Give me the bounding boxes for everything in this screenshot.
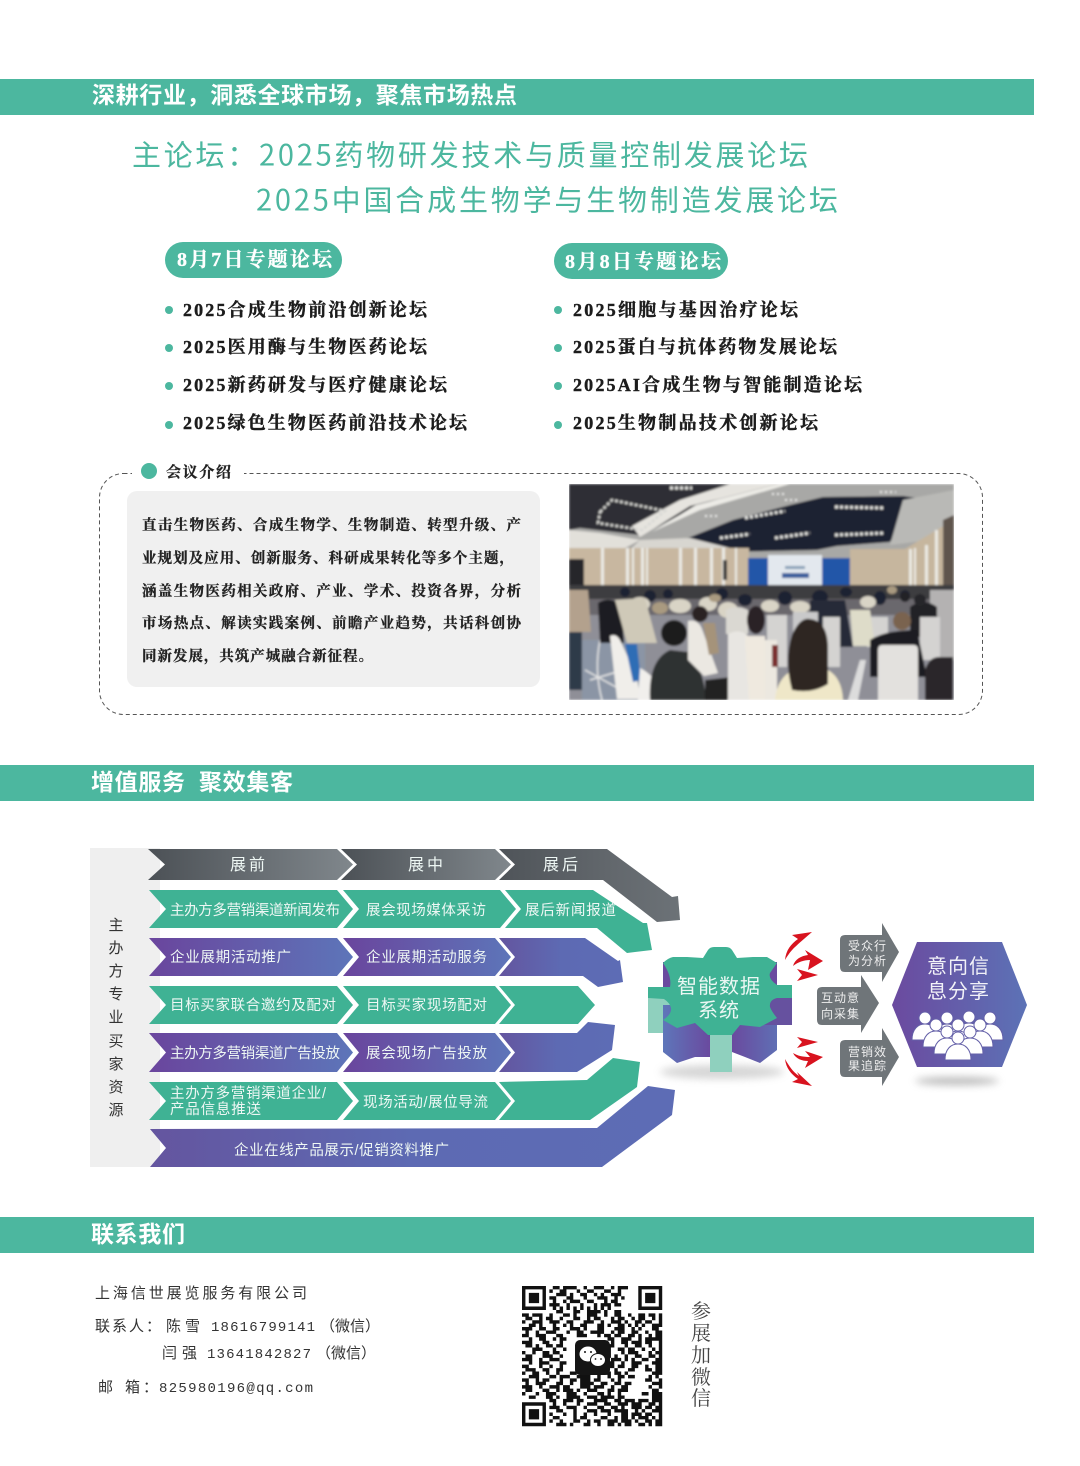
text block: contact details: 邮: [98, 1379, 113, 1396]
arrow: interactive intent collection: 互动意: [821, 990, 859, 1005]
vertical label: add WeChat: 参: [691, 1300, 711, 1323]
QR code: [522, 1286, 662, 1426]
section banner: contact us: [0, 1217, 1034, 1253]
main forum title: [132, 132, 838, 220]
vertical label: add WeChat: 信: [691, 1387, 711, 1410]
main forum title: 主论坛：2025药物研发技术与质量控制发展论坛: [132, 132, 808, 174]
text block: contact details: （微信）: [320, 1318, 380, 1335]
row: product push: 产品信息推送: [170, 1101, 262, 1118]
text block: contact details: 联系人：: [95, 1318, 161, 1335]
vertical label: add WeChat: 微: [691, 1366, 711, 1389]
text block: contact details: [95, 1285, 380, 1397]
row: advertising: 展会现场广告投放: [366, 1045, 488, 1062]
arrow: interactive intent collection: 向采集: [821, 1006, 859, 1021]
section banner: value-added services: 增值服务: [91, 769, 185, 795]
panel: August 7 forums: 2025医用酶与生物医药论坛: [183, 337, 429, 357]
arrow: audience behavior analysis: [840, 923, 899, 982]
row: buyer matching: [149, 986, 595, 1024]
panel: organizer buyer resources: 方: [108, 963, 124, 980]
panel: August 8 forums: 2025蛋白与抗体药物发展论坛: [573, 337, 839, 357]
row: online promotion: 企业在线产品展示/促销资料推广: [234, 1141, 449, 1159]
panel: conference introduction: [100, 460, 982, 714]
arrow: marketing effect tracking: 营销效: [848, 1044, 886, 1059]
text block: contact details: 825980196@qq.com: [159, 1381, 313, 1397]
row: stage header: 展前: [230, 856, 265, 874]
hexagon: intent information sharing: [892, 942, 1027, 1085]
row: news release: 主办方多营销渠道新闻发布: [170, 902, 340, 919]
text block: introduction: 涵盖生物医药相关政府、产业、学术、投资各界，分析: [142, 582, 522, 600]
hexagon: intent information sharing: 意向信: [927, 955, 989, 978]
section banner: industry focus: 深耕行业，洞悉全球市场，聚焦市场热点: [92, 82, 517, 108]
arrow: interactive intent collection: [817, 975, 879, 1033]
icon: red arrows: [785, 932, 823, 1086]
panel: August 7 forums: 2025绿色生物医药前沿技术论坛: [183, 413, 469, 433]
icon: heading dot: [141, 463, 157, 479]
section banner: industry focus: [0, 79, 1034, 115]
text block: introduction: 市场热点、解读实践案例、前瞻产业趋势，共话科创协: [142, 614, 522, 632]
text block: contact details: 箱: [125, 1379, 140, 1396]
row: advertising: 主办方多营销渠道广告投放: [170, 1045, 340, 1062]
text block: introduction: 同新发展，共筑产城融合新征程。: [142, 647, 373, 665]
row: stage header: 展中: [408, 856, 443, 874]
row: product push: 主办方多营销渠道企业/: [170, 1084, 327, 1102]
row: product push: [149, 1058, 640, 1120]
text block: introduction: [127, 491, 540, 687]
row: news release: 展后新闻报道: [525, 902, 616, 919]
icon: smart data gear: 智能数据: [677, 975, 760, 998]
icon: WeChat logo: [575, 1340, 610, 1375]
arrow: marketing effect tracking: [840, 1028, 899, 1086]
section banner: value-added services: 聚效集客: [199, 769, 293, 795]
text block: contact details: （微信）: [316, 1345, 376, 1362]
text block: contact details: 陈雪: [166, 1317, 200, 1335]
panel: organizer buyer resources: 专: [108, 986, 124, 1003]
flow diagram: marketing channels: [90, 848, 1027, 1167]
panel: August 7 forums: [165, 242, 469, 433]
row: stage header: [148, 849, 680, 922]
panel: August 8 forums: 8月8日专题论坛: [565, 249, 723, 273]
row: exhibition activities: 企业展期活动推广: [170, 948, 291, 966]
section banner: contact us: 联系我们: [91, 1221, 185, 1247]
text block: introduction: 直击生物医药、合成生物学、生物制造、转型升级、产: [142, 516, 521, 534]
row: online promotion: [150, 1086, 675, 1167]
panel: organizer buyer resources: 业: [108, 1009, 124, 1026]
icon: smart data gear: [648, 947, 792, 1079]
panel: organizer buyer resources: [90, 848, 160, 1167]
row: stage header: 展后: [543, 856, 578, 874]
text block: contact details: ：: [143, 1379, 158, 1396]
panel: organizer buyer resources: 资: [108, 1079, 124, 1096]
text block: contact details: 上海信世展览服务有限公司: [95, 1285, 307, 1302]
row: product push: 现场活动/展位导流: [363, 1094, 488, 1111]
icon: crowd: [912, 1011, 1003, 1060]
panel: organizer buyer resources: 买: [108, 1033, 124, 1050]
row: advertising: [149, 1022, 615, 1072]
vertical label: add WeChat: 加: [691, 1344, 711, 1367]
row: buyer matching: 目标买家联合邀约及配对: [170, 997, 336, 1014]
panel: organizer buyer resources: 家: [108, 1056, 124, 1073]
text block: contact details: 18616799141: [211, 1320, 315, 1336]
text block: introduction: 业规划及应用、创新服务、科研成果转化等多个主题，: [142, 549, 514, 567]
panel: August 8 forums: [554, 243, 864, 433]
arrow: marketing effect tracking: 果追踪: [848, 1058, 886, 1073]
text block: contact details: 13641842827: [207, 1347, 311, 1363]
panel: August 8 forums: 2025生物制品技术创新论坛: [573, 412, 820, 433]
main forum title: 2025中国合成生物学与生物制造发展论坛: [256, 178, 838, 220]
row: exhibition activities: 企业展期活动服务: [366, 948, 487, 966]
arrow: audience behavior analysis: 受众行: [848, 939, 886, 953]
panel: organizer buyer resources: 主: [108, 917, 124, 934]
section banner: value-added services: [0, 765, 1034, 801]
icon: smart data gear: 系统: [698, 999, 739, 1022]
panel: August 8 forums: 2025AI合成生物与智能制造论坛: [573, 374, 864, 395]
row: news release: [149, 890, 652, 953]
row: news release: 展会现场媒体采访: [366, 902, 486, 919]
panel: August 8 forums: 2025细胞与基因治疗论坛: [573, 300, 800, 320]
heading: conference introduction: 会议介绍: [166, 463, 231, 481]
arrow: audience behavior analysis: 为分析: [848, 954, 886, 968]
panel: organizer buyer resources: 源: [108, 1102, 124, 1119]
row: buyer matching: 目标买家现场配对: [366, 997, 487, 1014]
text block: contact details: 闫强: [162, 1345, 197, 1362]
panel: August 7 forums: 2025新药研发与医疗健康论坛: [183, 374, 449, 395]
row: exhibition activities: [149, 938, 623, 987]
panel: organizer buyer resources: 办: [108, 940, 124, 957]
photo: conference hall audience: [569, 484, 954, 700]
hexagon: intent information sharing: 息分享: [927, 980, 989, 1003]
panel: August 7 forums: 8月7日专题论坛: [177, 247, 334, 271]
panel: August 7 forums: 2025合成生物前沿创新论坛: [183, 299, 429, 320]
vertical label: add WeChat: 展: [691, 1322, 711, 1345]
